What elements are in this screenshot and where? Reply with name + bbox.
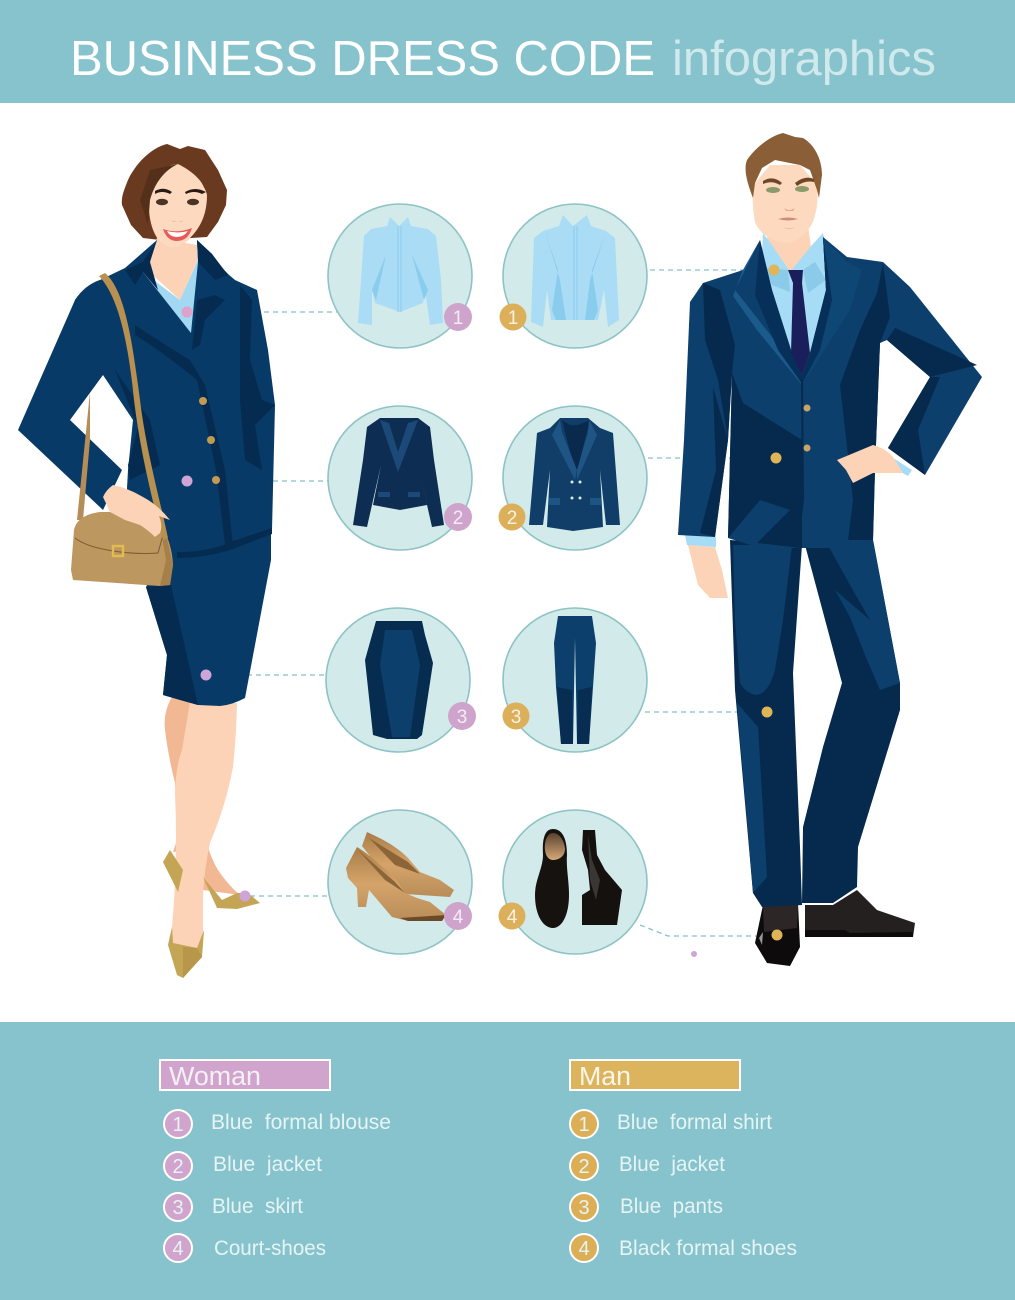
man right hand: [837, 445, 903, 483]
woman blouse: [143, 260, 200, 333]
legend list: man: Blue pants: [620, 1195, 723, 1218]
man pants: [730, 540, 900, 907]
title: BUSINESS DRESS CODE: [70, 32, 655, 86]
badges: woman items: 3: [457, 707, 467, 728]
woman shoes: [163, 850, 260, 978]
man left hand: [688, 545, 728, 598]
legend panel: [0, 1022, 1015, 1300]
man pants: far leg: [802, 540, 900, 903]
badges: man items: 2: [507, 508, 517, 529]
man tie: [788, 270, 810, 375]
header band: [0, 0, 1015, 103]
badges: man items: 3: [511, 707, 521, 728]
legend list: man: 1: [578, 1114, 590, 1136]
badges: woman items: 1: [453, 308, 463, 329]
legend: woman: [160, 1060, 391, 1262]
badges: man items: [498, 304, 530, 930]
woman neck and chest: [145, 238, 197, 300]
icon: trousers: [554, 616, 596, 744]
legend list: man: 4: [578, 1238, 590, 1260]
man pants: far leg highlight: [828, 540, 900, 690]
legend: man: [570, 1060, 797, 1262]
man jacket: [678, 237, 982, 548]
woman hand: [103, 485, 170, 537]
woman face: [140, 158, 212, 248]
legend list: woman: Court-shoes: [214, 1237, 326, 1260]
legend list: woman: Blue skirt: [212, 1195, 303, 1218]
stray marker: [691, 951, 697, 957]
legend list: man: [570, 1110, 797, 1262]
connector lines: [192, 270, 775, 936]
man hair: [746, 133, 822, 198]
item circles: [326, 204, 647, 954]
woman legs: [165, 697, 240, 950]
woman bag: [71, 392, 173, 586]
legend list: woman: Blue jacket: [213, 1153, 322, 1176]
markers: woman: [182, 306, 250, 902]
figure: woman: [18, 144, 275, 978]
badges: woman items: 2: [453, 508, 463, 529]
woman bag strap: [99, 273, 168, 540]
woman skirt: [146, 530, 271, 706]
man facial features: [763, 178, 814, 229]
title: infographics: [672, 32, 936, 86]
badges: man items: 4: [507, 907, 518, 928]
legend list: woman: Blue formal blouse: [211, 1111, 391, 1134]
legend list: woman: 3: [172, 1197, 184, 1219]
woman hair: [122, 144, 227, 240]
man shirt cuff: [685, 535, 716, 547]
man shirt: [762, 233, 827, 375]
man pants: near leg: [730, 540, 802, 907]
legend heading: man: Man: [579, 1063, 631, 1091]
legend list: man: Black formal shoes: [619, 1237, 797, 1260]
man shoes: [755, 890, 915, 966]
title: [70, 32, 936, 86]
legend list: woman: 4: [172, 1238, 184, 1260]
legend list: man: 2: [578, 1156, 590, 1178]
legend list: man: 3: [578, 1197, 590, 1219]
legend list: woman: 2: [172, 1156, 184, 1178]
figure: man: [678, 133, 982, 966]
man right cuff: [890, 458, 912, 476]
icon: court shoes: [346, 832, 454, 921]
man neck and face: [753, 165, 818, 275]
legend list: man: Blue formal shirt: [617, 1111, 772, 1134]
legend list: woman: [164, 1110, 391, 1262]
badges: man items: 1: [508, 308, 518, 329]
badges: woman items: 4: [453, 907, 464, 928]
icon: oxford shoes: [535, 829, 622, 928]
legend heading: woman: Woman: [169, 1063, 261, 1091]
icon: men's jacket: [529, 418, 620, 531]
man pants: near leg highlights: [733, 545, 792, 893]
icon: women's jacket: [353, 418, 444, 527]
icon: men's shirt: [531, 215, 619, 327]
woman jacket: [18, 240, 275, 558]
markers: man: [762, 264, 782, 940]
legend list: woman: 1: [172, 1114, 184, 1136]
legend heading: woman: [160, 1060, 330, 1091]
icon: blouse: [358, 217, 443, 325]
legend heading: man: [570, 1060, 740, 1091]
legend list: man: Blue jacket: [619, 1153, 725, 1176]
badges: woman items: [444, 303, 476, 930]
icon: skirt: [365, 621, 433, 739]
